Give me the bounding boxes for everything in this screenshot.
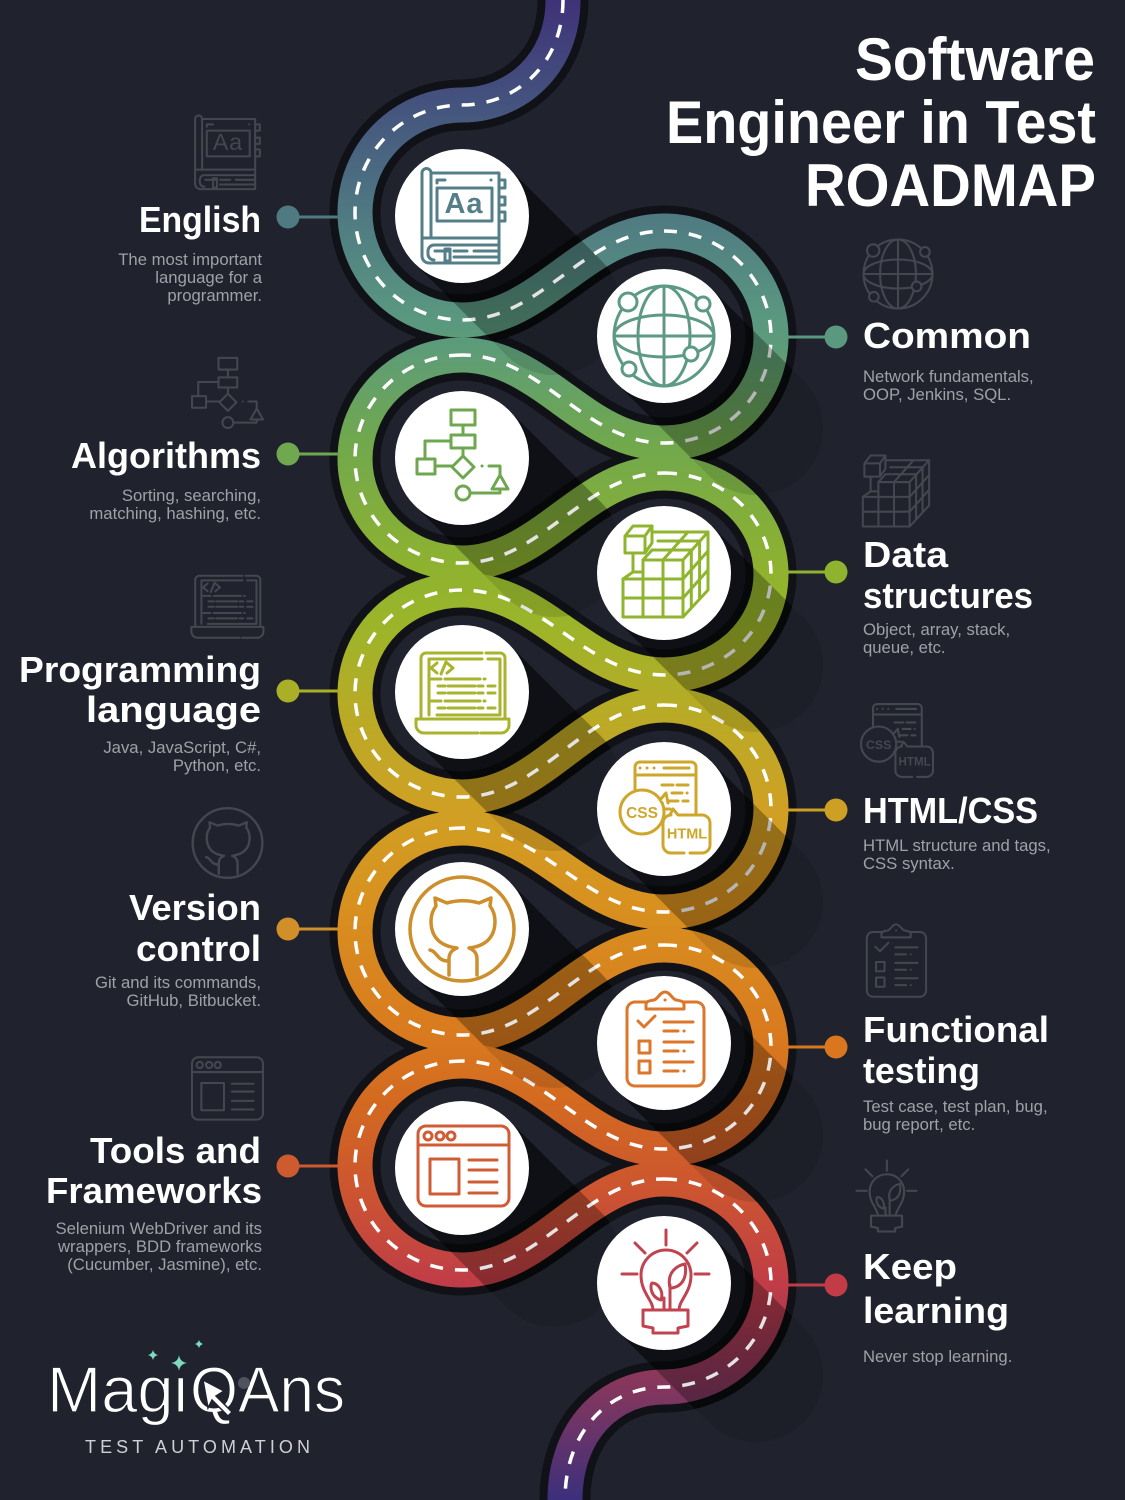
dot: Version control <box>276 918 300 940</box>
text: Common description: OOP, Jenkins, SQL. <box>863 385 1011 404</box>
icon: github <box>410 877 514 981</box>
logo wordmark: Magi <box>47 1353 188 1426</box>
heading: Common: Common <box>863 315 1031 356</box>
icon: book <box>422 168 505 263</box>
icon: algorithm flowchart <box>417 410 508 500</box>
heading: Tools and Frameworks: Frameworks <box>46 1170 262 1211</box>
dot: Data structures <box>824 560 848 584</box>
text: Programming description: Python, etc. <box>173 756 261 775</box>
logo tagline: TEST AUTOMATION <box>85 1437 310 1457</box>
faint long shadows <box>462 216 756 1375</box>
heading: Keep learning: Keep <box>863 1246 957 1287</box>
title: ROADMAP <box>805 152 1096 219</box>
heading: Algorithms: Algorithms <box>71 435 261 476</box>
text: Functional testing description: bug report, etc. <box>863 1115 975 1134</box>
dot: Tools <box>276 1154 300 1178</box>
ghost icon: book: Aa <box>213 129 243 155</box>
icon: laptop code <box>416 653 509 733</box>
ghost icon: html css <box>861 704 933 777</box>
road outline <box>355 0 771 1500</box>
dot: English <box>276 206 300 228</box>
logo cursor <box>203 1380 232 1416</box>
title: Software <box>855 26 1095 93</box>
road segments with shadows <box>355 0 771 1500</box>
heading: Version control: control <box>136 928 261 969</box>
logo i-dot mask <box>173 1358 185 1373</box>
ghost icon: book <box>195 115 260 189</box>
ghost icon: browser <box>192 1057 263 1120</box>
ghost icon: html css: CSS <box>866 738 891 752</box>
icon: clipboard checklist <box>627 992 704 1086</box>
text: Algorithms description: matching, hashing, etc. <box>89 504 261 523</box>
ghost icon: clipboard <box>867 924 926 997</box>
text: Tools description: (Cucumber, Jasmine), etc. <box>67 1255 262 1274</box>
ghost icon: flowchart <box>192 358 263 428</box>
ghost icon: bulb <box>857 1160 917 1232</box>
logo dot <box>238 1377 250 1389</box>
heading: Functional testing: Functional <box>863 1009 1049 1050</box>
icon: html css: HTML <box>667 826 707 842</box>
text: Common description: Network fundamentals, <box>863 367 1034 386</box>
icon: html css: CSS <box>626 805 658 822</box>
text: HTML/CSS description: HTML structure and tags, <box>863 836 1051 855</box>
logo sparkles <box>148 1340 203 1371</box>
heading: English: English <box>139 199 261 240</box>
text: Tools description: Selenium WebDriver and its <box>55 1219 262 1238</box>
heading: Functional testing: testing <box>863 1050 980 1091</box>
text: Version control description: Git and its commands, <box>95 973 261 992</box>
dot: Programming <box>276 680 300 702</box>
connector lines <box>288 217 836 1285</box>
text: English description: language for a <box>155 268 263 287</box>
text: Programming description: Java, JavaScript, C#, <box>103 738 261 757</box>
text: English description: The most important <box>118 250 262 269</box>
icon: data cube <box>623 526 708 617</box>
heading: Keep learning: learning <box>863 1290 1009 1331</box>
heading: Data structures: Data <box>863 534 949 575</box>
heading: Version control: Version <box>129 887 261 928</box>
heading: Programming language: language <box>86 689 261 730</box>
heading: HTML/CSS: HTML/CSS <box>863 790 1038 831</box>
dot: Algorithms <box>276 442 300 466</box>
dot: HTML/CSS <box>824 798 848 822</box>
heading: Data structures: structures <box>863 575 1033 616</box>
text: HTML/CSS description: CSS syntax. <box>863 854 955 873</box>
dot: Functional testing <box>824 1036 848 1058</box>
title: Engineer in Test <box>666 89 1096 156</box>
ghost icon: cube <box>863 456 929 527</box>
icon: html css <box>620 762 710 853</box>
text: Data structures description: Object, array, stack, <box>863 620 1010 639</box>
text: Keep learning description: Never stop learning. <box>863 1347 1012 1366</box>
text: Algorithms description: Sorting, searching, <box>122 486 261 505</box>
icon: book: Aa <box>444 188 484 220</box>
text: Data structures description: queue, etc. <box>863 638 946 657</box>
logo wordmark: Ans <box>238 1353 345 1426</box>
icon: globe <box>614 286 714 386</box>
icon: browser window <box>418 1126 509 1206</box>
dot: Common <box>824 326 848 348</box>
heading: Programming language: Programming <box>19 649 261 690</box>
ghost icon: html css: HTML <box>898 755 931 768</box>
text: Tools description: wrappers, BDD frameworks <box>57 1237 262 1256</box>
ghost icon: globe <box>864 240 932 308</box>
ghost icon: laptop <box>191 576 263 638</box>
dot: Keep learning <box>824 1274 848 1296</box>
text: Version control description: GitHub, Bitbucket. <box>126 991 261 1010</box>
text: English description: programmer. <box>167 286 262 305</box>
icon: light bulb <box>622 1230 709 1333</box>
text: Functional testing description: Test case, test plan, bug, <box>863 1097 1048 1116</box>
heading: Tools and Frameworks: Tools and <box>90 1130 261 1171</box>
logo wordmark: Q <box>190 1353 238 1426</box>
interior loop shadows <box>462 216 756 1375</box>
logo <box>47 1340 345 1457</box>
ghost icon: github <box>193 808 262 878</box>
white circles <box>395 149 731 1350</box>
